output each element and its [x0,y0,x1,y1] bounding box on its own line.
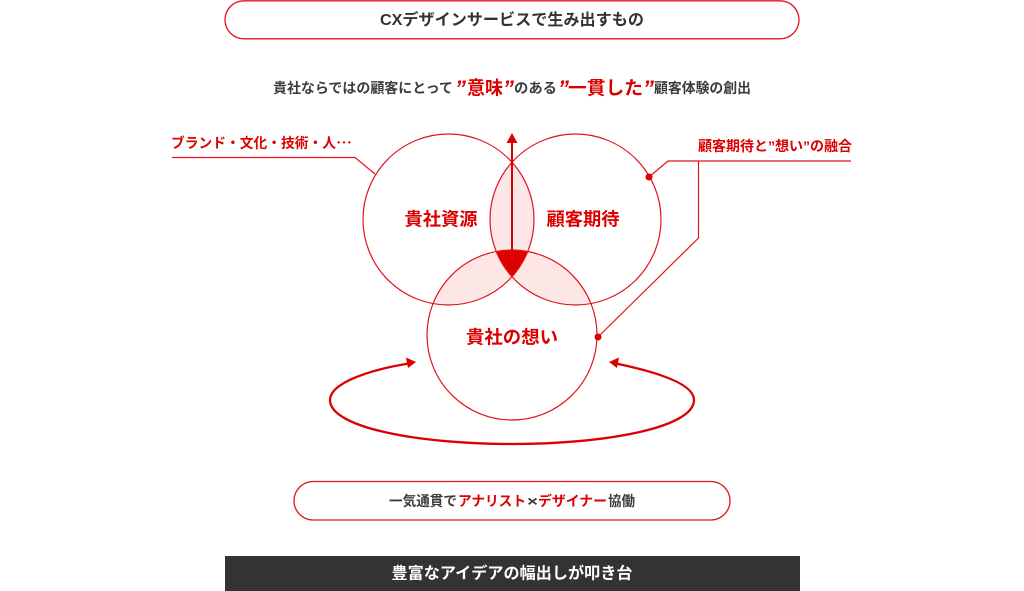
title pill [225,1,799,39]
subtitle [273,76,751,101]
subtitle: 意味 [467,78,503,98]
pill: analyst and designer collaboration: アナリスト [458,493,526,509]
subtitle: 一貫した [568,78,643,98]
circle: company aspirations [427,250,597,420]
pill: analyst and designer collaboration: × [527,493,538,509]
subtitle: 貴社ならではの顧客にとって [273,80,453,96]
callout: fusion of expectations and aspirations [594,138,852,340]
callout: brand culture technology people: … [336,133,352,153]
pill: analyst and designer collaboration: デザイナー [538,493,607,509]
pill: analyst and designer collaboration: 一気通貫で [389,493,457,509]
footer bar: 豊富なアイデアの幅出しが叩き台 [392,564,632,582]
overlap: right and bottom circles [513,252,590,304]
subtitle: ” [558,76,569,101]
callout: fusion of expectations and aspirations: 顧客期待と”想い”の融合 [698,138,852,154]
subtitle: 顧客体験の創出 [654,80,751,96]
label: customer expectations: 顧客期待 [546,210,620,230]
title pill: CXデザインサービスで生み出すもの [380,10,644,29]
callout: brand culture technology people [171,133,375,174]
callout: brand culture technology people: ブランド・文化・技術・人 [171,135,336,151]
pill: analyst and designer collaboration: 協働 [608,493,635,509]
circle: customer expectations [490,134,661,305]
circle: company resources [363,134,534,305]
arrow: cycle loop [330,358,694,444]
overlap: left and bottom circles [434,252,511,304]
label: company resources: 貴社資源 [404,210,478,230]
pill: analyst and designer collaboration [294,482,730,520]
footer bar [225,556,800,591]
subtitle: ” [643,76,654,101]
subtitle: のある [514,80,557,96]
label: company aspirations: 貴社の想い [466,328,558,348]
overlap: left and right circles [490,164,534,251]
arrow: upward [506,133,518,250]
subtitle: ” [503,76,514,101]
overlap: all three circles [497,250,527,276]
venn diagram [363,134,661,420]
subtitle: ” [455,76,466,101]
